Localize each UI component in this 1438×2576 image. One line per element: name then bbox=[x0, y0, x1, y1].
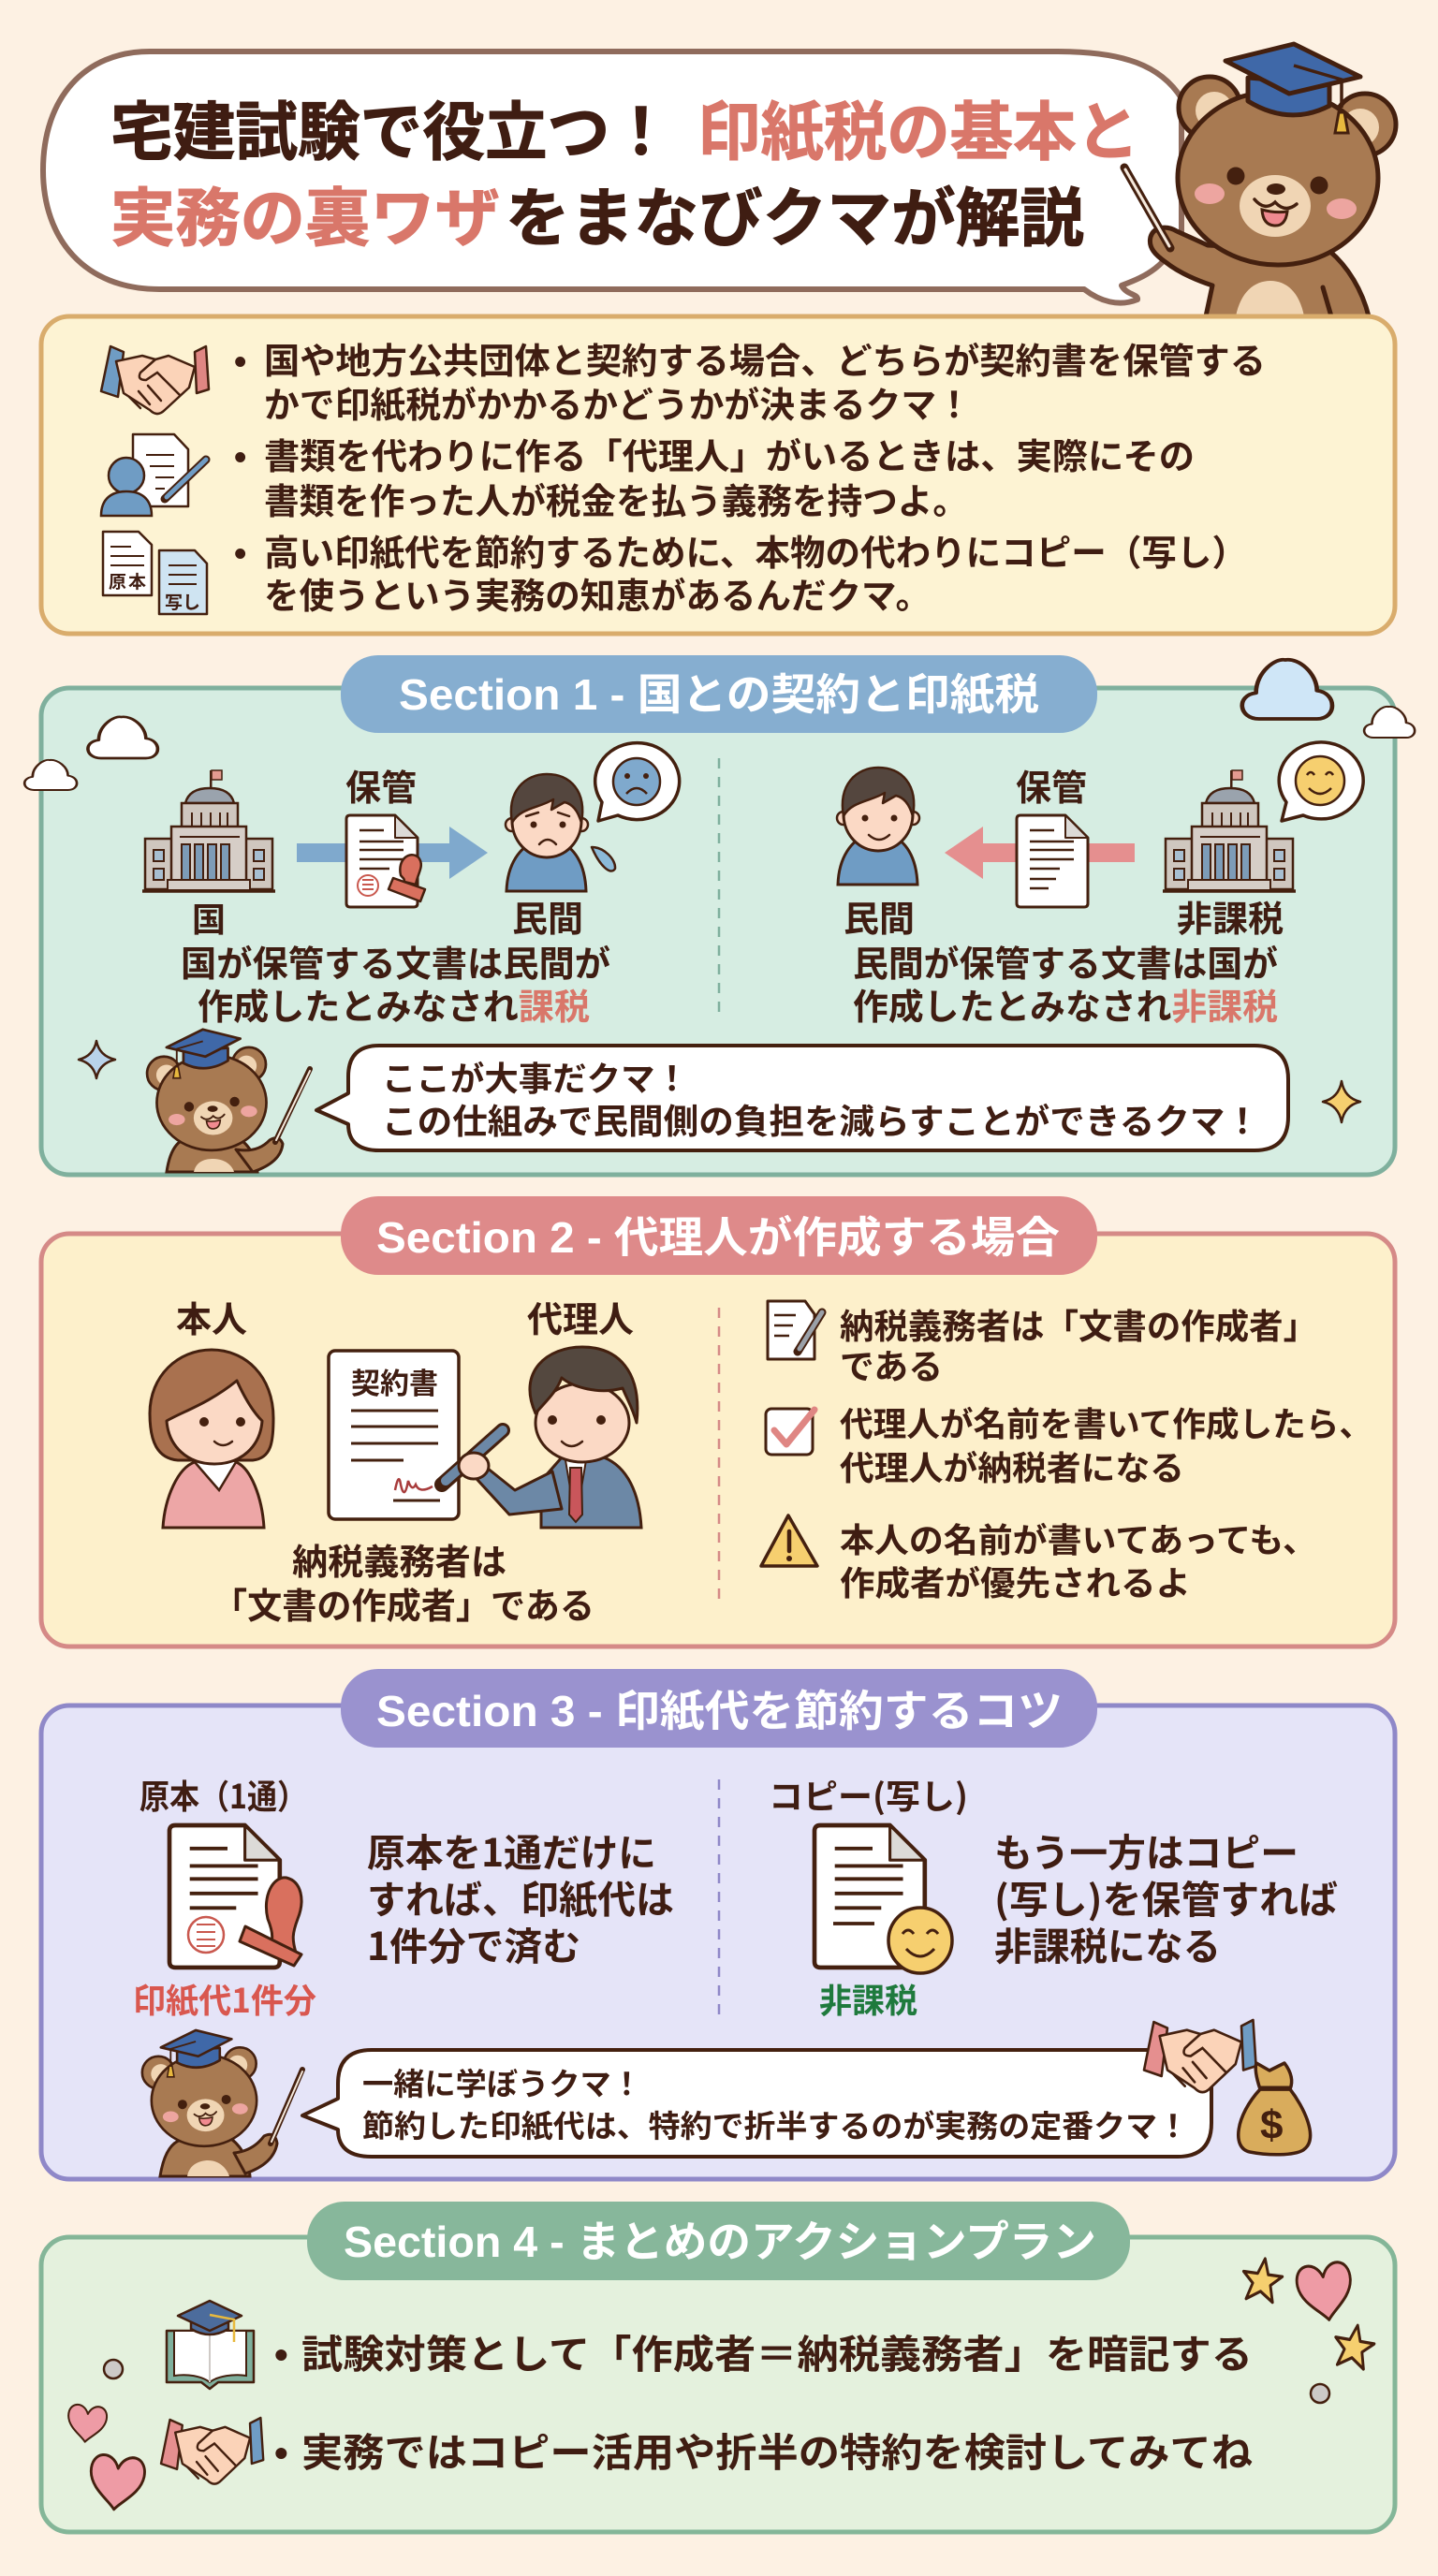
copy explanation: (写し)を保管すれば bbox=[994, 1868, 1338, 1925]
principal figure bbox=[150, 1291, 273, 1528]
left caption bbox=[213, 1533, 594, 1629]
icon: agent writing a document bbox=[101, 434, 206, 516]
point 1: である bbox=[840, 1339, 943, 1389]
right: pink arrow bbox=[945, 827, 1135, 879]
left caption: 作成したとみなされ課税 bbox=[198, 978, 590, 1030]
icon: handshake bbox=[161, 2418, 263, 2484]
icon: money bag bbox=[1239, 2063, 1311, 2155]
left: worried private person bbox=[506, 774, 615, 942]
callout: section 3: 節約した印紙代は、特約で折半するのが実務の定番クマ！ bbox=[362, 2101, 1189, 2146]
section 2 heading: Section 2 - 代理人が作成する場合 bbox=[376, 1213, 1060, 1262]
icon: document and pen bbox=[768, 1301, 822, 1359]
icon: check box bbox=[766, 1409, 814, 1455]
title text line 1: 宅建試験で役立つ！ bbox=[110, 80, 672, 173]
summary text: • bbox=[234, 438, 246, 477]
copy document block: コピー(写し) bbox=[769, 1770, 968, 1819]
panel: section 2 bbox=[41, 1196, 1395, 1647]
point 2: 代理人が納税者になる bbox=[840, 1442, 1184, 1490]
left: worried private person: 民間 bbox=[512, 890, 583, 942]
right caption: 民間が保管する文書は国が bbox=[853, 935, 1278, 987]
summary text: • bbox=[234, 343, 246, 382]
left caption: 納税義務者は bbox=[292, 1533, 506, 1585]
summary text: 高い印紙代を節約するために、本物の代わりにコピー（写し） bbox=[264, 524, 1247, 576]
right: happy speech bubble bbox=[1279, 742, 1363, 821]
action 1: 試験対策として「作成者＝納税義務者」を暗記する bbox=[301, 2323, 1253, 2380]
summary text: • bbox=[234, 534, 246, 574]
title text line 1 bbox=[110, 80, 1139, 173]
original document block bbox=[133, 1770, 316, 2023]
action 1: • bbox=[274, 2333, 288, 2377]
left: sad speech bubble bbox=[595, 743, 680, 821]
section 4 heading: Section 4 - まとめのアクションプラン bbox=[344, 2217, 1096, 2266]
icon: original and copy documents: 写し bbox=[165, 589, 200, 614]
summary text: 国や地方公共団体と契約する場合、どちらが契約書を保管する bbox=[264, 332, 1266, 384]
agent figure bbox=[442, 1291, 641, 1528]
left caption: 「文書の作成者」である bbox=[213, 1577, 594, 1629]
copy explanation: 非課税になる bbox=[994, 1915, 1221, 1971]
point 1 bbox=[840, 1298, 1317, 1389]
section 1 heading: Section 1 - 国との契約と印紙税 bbox=[399, 670, 1039, 719]
copy explanation bbox=[994, 1822, 1338, 1971]
icon: handshake bbox=[101, 346, 209, 414]
callout: section 3: 一緒に学ぼうクマ！ bbox=[362, 2059, 642, 2104]
action 2: • bbox=[274, 2431, 288, 2475]
title text line 2: 実務の裏ワザ bbox=[110, 167, 500, 259]
point 3: 作成者が優先されるよ bbox=[840, 1557, 1191, 1605]
contract document bbox=[329, 1351, 459, 1519]
left caption: 国が保管する文書は民間が bbox=[181, 935, 610, 987]
icon: original and copy documents: 原本 bbox=[109, 568, 146, 593]
section 4 heading bbox=[307, 2202, 1130, 2280]
bear: section 1 bbox=[147, 1030, 310, 1172]
icon: handshake bbox=[1144, 2020, 1256, 2092]
panel: summary bbox=[41, 316, 1395, 634]
callout: section 1 bbox=[316, 1046, 1288, 1150]
section 2 heading bbox=[341, 1196, 1097, 1275]
left: blue arrow bbox=[297, 827, 488, 879]
copy document block bbox=[769, 1770, 968, 2023]
callout: section 3 bbox=[302, 2050, 1211, 2157]
left: state building: 国 bbox=[192, 893, 226, 942]
title text line 2: をまなびクマが解説 bbox=[506, 167, 1084, 259]
left: stamped document bbox=[345, 759, 425, 907]
right: document bbox=[1016, 759, 1088, 907]
right: non-taxable building: 非課税 bbox=[1177, 890, 1284, 942]
point 2 bbox=[840, 1398, 1372, 1490]
title speech bubble bbox=[43, 51, 1181, 303]
original explanation: すれば、印紙代は bbox=[367, 1868, 674, 1925]
original document block: 原本（1通） bbox=[139, 1770, 307, 1819]
action 2: 実務ではコピー活用や折半の特約を検討してみてね bbox=[301, 2422, 1253, 2479]
original explanation bbox=[367, 1822, 674, 1971]
left: state building bbox=[142, 770, 275, 942]
summary text: 書類を作った人が税金を払う義務を持つよ。 bbox=[264, 473, 968, 524]
original explanation: 1件分で済む bbox=[367, 1915, 580, 1971]
point 2: 代理人が名前を書いて作成したら、 bbox=[840, 1398, 1372, 1446]
summary text bbox=[234, 332, 1266, 619]
point 1: 納税義務者は「文書の作成者」 bbox=[840, 1298, 1317, 1349]
right: non-taxable building bbox=[1163, 770, 1296, 942]
section 3 heading bbox=[341, 1669, 1097, 1748]
icon: book and cap bbox=[167, 2301, 254, 2389]
title text line 2 bbox=[110, 167, 1084, 259]
section 1 heading bbox=[341, 655, 1097, 733]
callout: section 1: ここが大事だクマ！ bbox=[382, 1052, 689, 1101]
right: private person: 民間 bbox=[844, 890, 915, 942]
decorations bbox=[66, 2256, 1377, 2512]
summary text: を使うという実務の知恵があるんだクマ。 bbox=[264, 567, 931, 619]
panel: section 3 bbox=[41, 1669, 1395, 2179]
mascot bear with pointer bbox=[1124, 44, 1396, 316]
original explanation: 原本を1通だけに bbox=[367, 1822, 656, 1878]
left caption bbox=[181, 935, 610, 1030]
right caption bbox=[853, 935, 1278, 1030]
right caption: 作成したとみなされ非課税 bbox=[853, 978, 1278, 1030]
right: private person bbox=[837, 768, 919, 942]
right: document: 保管 bbox=[1016, 759, 1087, 811]
icon: money bag: $ bbox=[1260, 2102, 1283, 2148]
copy explanation: もう一方はコピー bbox=[994, 1822, 1299, 1878]
copy document block: 非課税 bbox=[819, 1974, 917, 2023]
summary text: 書類を代わりに作る「代理人」がいるときは、実際にその bbox=[264, 428, 1195, 479]
contract document: 契約書 bbox=[351, 1360, 438, 1402]
callout: section 1: この仕組みで民間側の負担を減らすことができるクマ！ bbox=[382, 1093, 1260, 1144]
bear: section 3 bbox=[142, 2030, 302, 2176]
title text line 1: 印紙税の基本と bbox=[697, 80, 1139, 173]
panel: section 1 bbox=[24, 655, 1415, 1175]
principal figure: 本人 bbox=[176, 1291, 247, 1342]
icon: warning triangle bbox=[761, 1515, 817, 1566]
point 3: 本人の名前が書いてあっても、 bbox=[840, 1514, 1317, 1562]
icon: original and copy documents bbox=[103, 532, 207, 614]
agent figure: 代理人 bbox=[527, 1291, 634, 1342]
section 3 heading: Section 3 - 印紙代を節約するコツ bbox=[376, 1687, 1063, 1735]
panel: section 4 bbox=[41, 2202, 1395, 2532]
clouds and sparkles bbox=[24, 660, 1415, 1122]
original document block: 印紙代1件分 bbox=[133, 1974, 316, 2023]
left: stamped document: 保管 bbox=[345, 759, 417, 811]
point 3 bbox=[840, 1514, 1317, 1605]
summary text: かで印紙税がかかるかどうかが決まるクマ！ bbox=[264, 376, 972, 428]
